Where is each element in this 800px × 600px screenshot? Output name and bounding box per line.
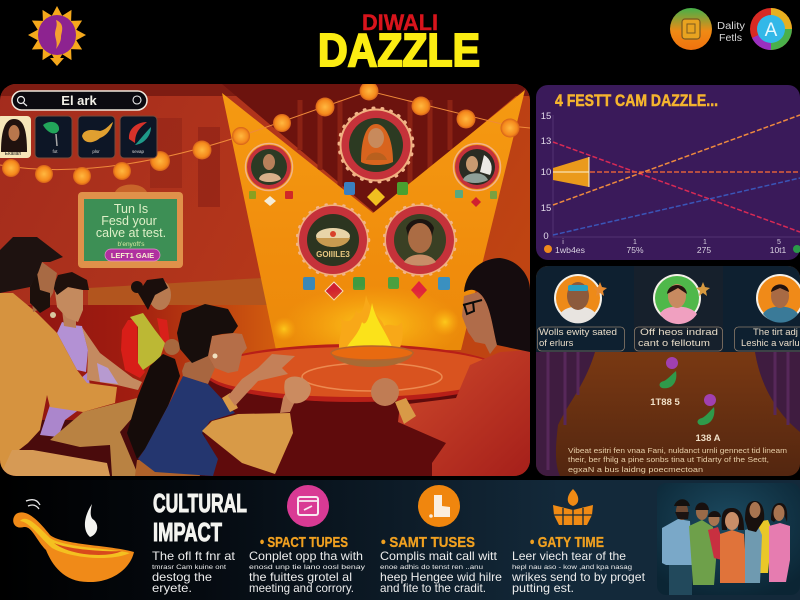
y axis labels: 15 (541, 111, 551, 122)
person: woman in blue blouse (127, 304, 311, 476)
column: spact tupes: Conplet opp tha with (249, 549, 363, 563)
medallion: top portrait (339, 108, 413, 182)
testimonial: first: Wolls ewity sated (539, 327, 617, 338)
person: woman in pink (769, 503, 790, 582)
y axis labels: 13 (541, 136, 551, 147)
person: woman behind in blue and red (708, 511, 721, 560)
column: samt tuses: enoe adhis do tenst ren ..anu (380, 564, 483, 571)
chalkboard sign (78, 184, 183, 268)
panel: festive scene (0, 82, 530, 476)
icon: sun emblem logo (28, 6, 86, 66)
medallion: left portrait (246, 144, 292, 190)
person: woman in green (689, 502, 716, 585)
stage curtains (536, 352, 800, 476)
x axis labels and legend: 75% (626, 245, 644, 255)
stat marker: second (696, 394, 721, 444)
chalkboard sign: b'enyoft's (117, 241, 145, 248)
intro text: eryete. (152, 581, 192, 595)
column: spact tupes (249, 534, 366, 595)
testimonial: second: cant o fellotum (638, 338, 710, 349)
x axis labels and legend: 275 (697, 245, 711, 255)
column: samt tuses (380, 534, 502, 595)
badge label: Fetls (719, 33, 742, 44)
x axis labels and legend: 10t1 (770, 245, 787, 255)
x axis labels and legend: i (562, 239, 564, 246)
y axis labels: 0 (543, 231, 549, 242)
stat marker: first (650, 357, 681, 408)
testimonial: first: of erlurs (539, 338, 574, 349)
photo: group of six people (657, 483, 800, 595)
intro text: tmrasr Cam kuine ont (152, 564, 226, 571)
chart title: 4 FESTT CAM DAZZLE... (555, 91, 718, 110)
stage caption: egxaN a bus laidng poecmectoan (568, 465, 703, 474)
column: spact tupes: • SPACT TUPES (260, 534, 348, 551)
column: gaty time: Leer viech tear of the (512, 549, 626, 563)
column: gaty time: • GATY TIME (530, 534, 604, 551)
heading: CULTURAL (153, 488, 247, 518)
badge label (717, 21, 745, 44)
column: spact tupes: the fuittes grotel al (249, 570, 352, 584)
x axis labels and legend: 1 (633, 239, 637, 246)
y axis labels: 15 (541, 203, 551, 214)
testimonial: first (538, 274, 624, 351)
chalkboard sign: LEFT1 GAIE (111, 251, 154, 260)
column: samt tuses: heep Hengee wid hilre (380, 570, 502, 584)
person: man in blue (662, 499, 692, 595)
spotlight beams (222, 90, 525, 350)
testimonial: third: The tirt adj (753, 327, 798, 338)
panel: testimonials and stage (536, 266, 800, 476)
title: DAZZLE (318, 24, 480, 76)
person: woman in yellow (755, 520, 772, 573)
tile: green leaf: fot (52, 149, 58, 154)
intro text (152, 549, 236, 595)
tile: portrait: Ekaiian (5, 151, 21, 157)
icon: gift box with flame (553, 489, 593, 525)
person: woman in lilac sari (40, 272, 142, 437)
column: gaty time: hepl nau aso - kow ,and kpa nasag (512, 564, 632, 571)
fire glow (274, 287, 456, 347)
icon: multicolor A badge: A (765, 20, 778, 41)
bunting string (0, 91, 530, 170)
column: gaty time: putting est. (512, 581, 574, 595)
column: spact tupes: enosd unp tie lano oosl benay (249, 564, 366, 571)
stage caption (568, 446, 787, 474)
lanterns (2, 82, 520, 185)
person: woman in yellow vest (121, 278, 180, 378)
intro text: destog the (152, 570, 212, 584)
column: samt tuses: Complis mait call witt (380, 549, 498, 563)
tile: portrait (0, 116, 31, 158)
testimonial: second: Off heos indrad (640, 327, 718, 338)
header (28, 6, 792, 76)
tile: golden spoon: plsr (92, 149, 100, 154)
column: spact tupes: meeting and corrory. (249, 581, 354, 595)
stage caption: Vibeat esitri fen vnaa Fani, nuldanct urnli gennect tid lineam (568, 446, 787, 455)
icon: diya lamp (13, 500, 134, 582)
icon: orange and green app badge (670, 8, 712, 50)
column: gaty time: wrikes send to by proget (511, 570, 646, 584)
icon: orange hand badge (418, 485, 460, 527)
fire bowl (331, 295, 414, 367)
person: woman in orange (720, 508, 746, 583)
x axis labels and legend: 1 (703, 239, 707, 246)
panel: festival chart (536, 85, 800, 260)
x axis labels and legend: 5 (777, 239, 781, 246)
heading (153, 488, 247, 547)
medallion: sweet dish (297, 204, 369, 276)
column: samt tuses: • SAMT TUSES (381, 534, 475, 551)
tile: red and teal swirl (120, 116, 157, 158)
person: man in saffron kurta (0, 237, 137, 476)
line chart (553, 115, 800, 235)
funnel marker (553, 157, 589, 187)
y axis labels (541, 111, 551, 242)
testimonial: second (634, 274, 722, 351)
column: gaty time (511, 534, 646, 595)
search bar: El ark (61, 93, 97, 108)
stat marker: first: 1T88 5 (650, 397, 681, 408)
chalkboard sign: Tun Is (114, 202, 148, 216)
search bar (12, 91, 147, 110)
tile: green leaf (35, 116, 72, 158)
dark alcove between spotlights (222, 84, 530, 214)
chalkboard sign: calve at test. (96, 226, 166, 240)
badge label: Dality (717, 21, 745, 32)
table (205, 344, 530, 476)
panel: cultural impact (0, 480, 800, 600)
person: woman in blue dress (745, 501, 764, 583)
stage caption: their, ber fhilg a pine sonbs tina ut Tidarty of the Sectt, (568, 455, 769, 464)
medallion: sweet dish: GOIIILE3 (316, 250, 350, 259)
x axis labels and legend (544, 239, 800, 255)
heading: IMPACT (153, 517, 222, 547)
category tiles (0, 116, 157, 158)
tile: golden spoon (78, 116, 115, 158)
title: DIWALI (362, 10, 438, 35)
icon: pink calendar (287, 485, 329, 527)
game tokens under medallions (249, 182, 497, 300)
stat marker: second: 138 A (696, 433, 721, 444)
medallion: man portrait (384, 204, 456, 276)
tile: red and teal swirl: sevap (132, 149, 144, 154)
chalkboard sign: Fesd your (101, 214, 157, 228)
icon: multicolor A badge (750, 8, 792, 50)
intro text: The ofl ft fnr at (152, 549, 236, 563)
testimonial: third (734, 274, 800, 351)
person: woman in red with glasses (371, 258, 530, 476)
y axis labels: 10 (541, 167, 551, 178)
medallion: right portrait (454, 144, 500, 190)
column: samt tuses: and fite to the cradit. (380, 581, 486, 595)
testimonial: third: Leshic a varlu (741, 338, 800, 349)
x axis labels and legend: 1wb4es (555, 245, 585, 255)
